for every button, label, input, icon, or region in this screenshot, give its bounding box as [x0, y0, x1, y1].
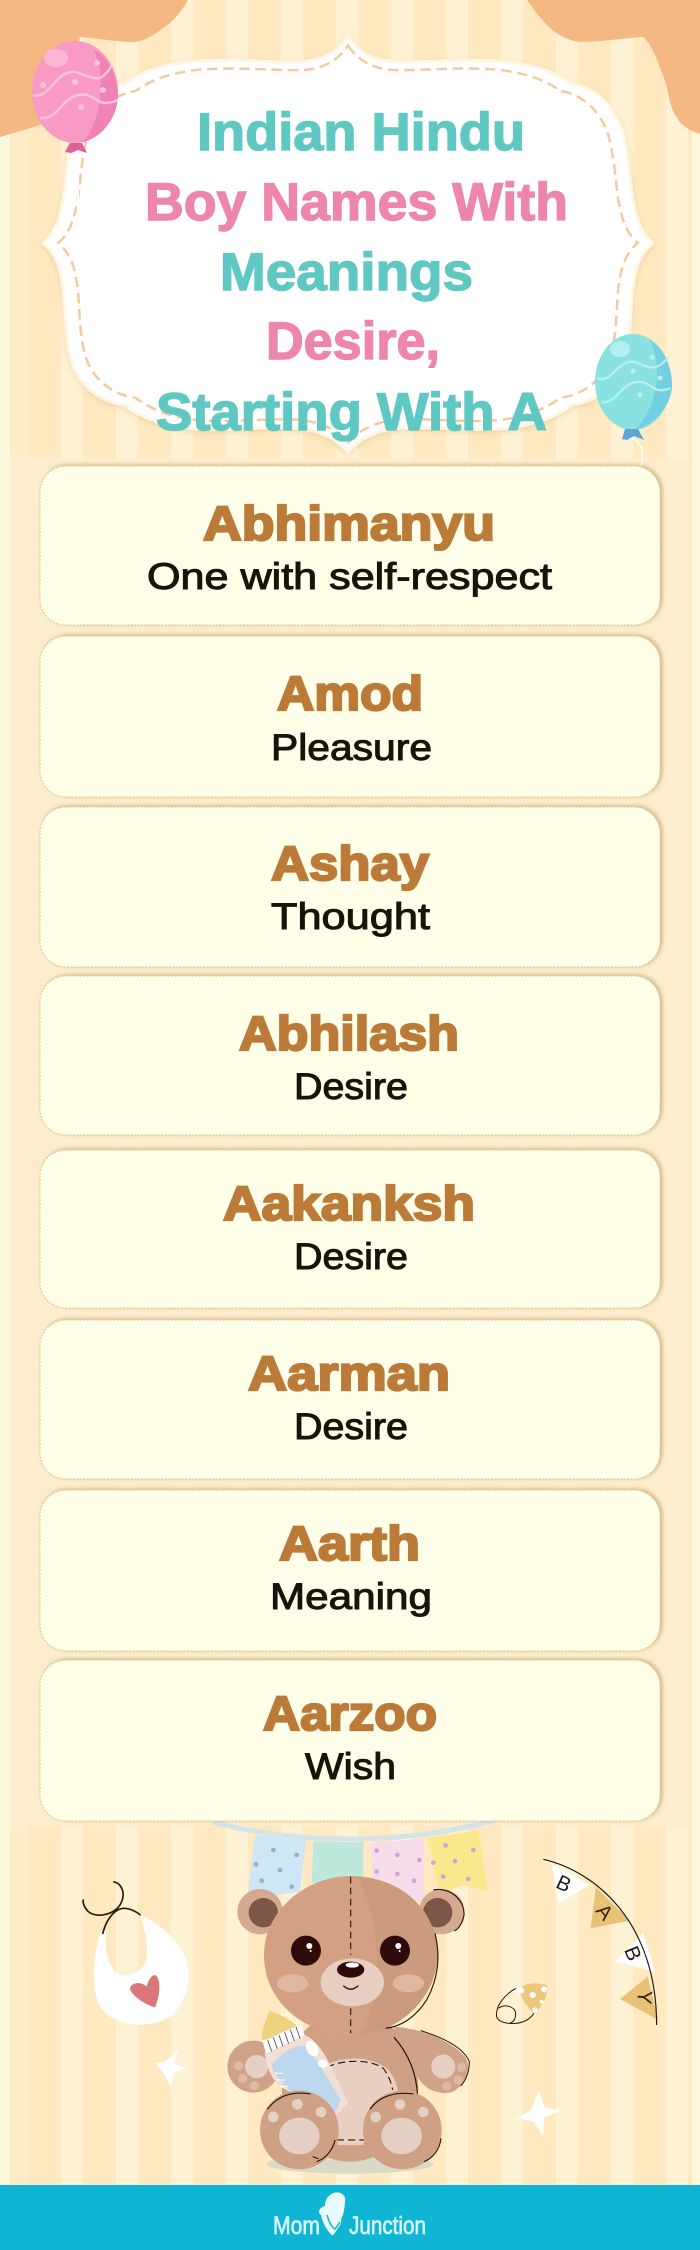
- flag: pink: [370, 1838, 424, 1903]
- card: Aakanksh: [40, 1150, 660, 1308]
- card: Amod: [40, 636, 660, 797]
- icon: pink balloon: [32, 41, 118, 250]
- card: Abhilash: [40, 976, 660, 1135]
- card: Ashay: [40, 807, 660, 967]
- title: Desire,: [266, 312, 440, 371]
- meaning: Thought: [271, 896, 431, 937]
- belly: [327, 2059, 398, 2145]
- teddy bear: [227, 1876, 469, 2174]
- name: Aarzoo: [263, 1688, 437, 1741]
- icon: bib: [83, 1882, 189, 2025]
- body: [282, 2012, 418, 2162]
- logo text: Junction: [349, 2212, 426, 2240]
- bottle: [262, 2011, 348, 2117]
- meaning: Desire: [294, 1406, 408, 1447]
- name: Abhilash: [239, 1008, 459, 1061]
- card: Aarman: [40, 1320, 660, 1479]
- curtain: top left: [0, 0, 188, 137]
- meaning: Desire: [294, 1066, 408, 1107]
- footer bar: [0, 2185, 700, 2250]
- meaning: Wish: [305, 1746, 396, 1787]
- bunting string: [213, 1813, 518, 1839]
- logo icon: [319, 2192, 345, 2235]
- baby banner: [543, 1859, 658, 2025]
- flag: green: [312, 1842, 363, 1883]
- flag B: B: [553, 1871, 575, 1897]
- icon: star left: [155, 2049, 186, 2087]
- name: Aarth: [279, 1518, 420, 1571]
- flag Y: [620, 1977, 658, 2020]
- flag B: B: [619, 1943, 646, 1964]
- eyes: [291, 1936, 321, 1966]
- icon: teal balloon: [595, 334, 672, 470]
- title: [145, 103, 568, 442]
- flag Y: Y: [632, 1989, 656, 2005]
- card: Aarth: [40, 1490, 660, 1651]
- seam: [349, 1877, 353, 2033]
- meaning: One with self-respect: [147, 556, 553, 597]
- bunting flags: [248, 1830, 488, 1903]
- flag B: [615, 1933, 655, 1972]
- flag B: [552, 1863, 590, 1903]
- right arm: [393, 2027, 469, 2093]
- card: Aarzoo: [40, 1660, 660, 1821]
- name: Aarman: [248, 1348, 450, 1401]
- icon: star right: [517, 2090, 560, 2136]
- flag: blue: [248, 1835, 306, 1895]
- head: [264, 1876, 438, 2035]
- left arm: [227, 2041, 279, 2093]
- flag: yellow: [427, 1830, 488, 1893]
- title: Meanings: [220, 243, 473, 302]
- name: Amod: [277, 668, 423, 721]
- title: Starting With A: [156, 383, 547, 442]
- muzzle: [321, 1958, 384, 2006]
- title plaque: [43, 36, 653, 452]
- curtain: top right: [527, 0, 700, 134]
- cheeks: [277, 1974, 308, 1992]
- banner string: [543, 1859, 657, 2025]
- flag A: [591, 1887, 630, 1928]
- meaning: Desire: [294, 1236, 408, 1277]
- name: Ashay: [271, 838, 429, 891]
- name: Aakanksh: [223, 1178, 475, 1231]
- ears: [237, 1889, 464, 1934]
- title: Boy Names With: [145, 173, 568, 232]
- title: Indian Hindu: [197, 103, 525, 162]
- meaning: Meaning: [270, 1576, 432, 1617]
- flag A: A: [591, 1900, 618, 1925]
- nose: [337, 1962, 364, 1978]
- logo text: Mom: [273, 2212, 320, 2240]
- icon: safety pin: [496, 1983, 547, 2023]
- name: Abhimanyu: [203, 498, 495, 551]
- left foot: [260, 2091, 339, 2169]
- shadow: [267, 2155, 433, 2174]
- meaning: Pleasure: [271, 727, 432, 768]
- right foot: [363, 2091, 442, 2169]
- card: Abhimanyu: [40, 466, 660, 625]
